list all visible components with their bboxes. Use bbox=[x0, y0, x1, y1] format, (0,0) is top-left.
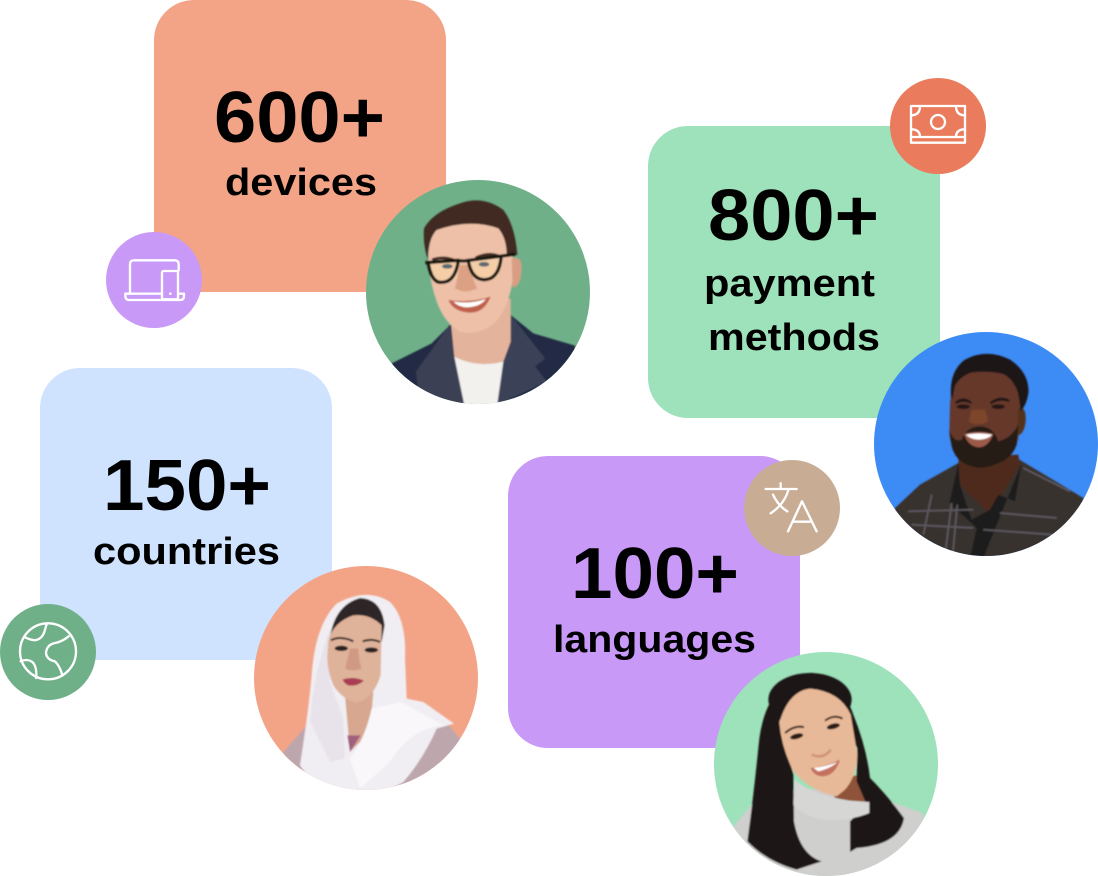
stat: 150+: 150+ bbox=[103, 446, 271, 526]
label: payment methods: payment bbox=[704, 263, 875, 305]
panel: countries bbox=[40, 368, 332, 660]
label: payment methods bbox=[704, 263, 880, 359]
portrait: woman with white headscarf bbox=[254, 566, 478, 790]
panel: payment methods bbox=[648, 126, 940, 418]
label: devices: devices bbox=[225, 162, 377, 204]
icon: laptop and tablet bbox=[106, 232, 202, 328]
icon: banknote bbox=[890, 78, 986, 174]
portrait: man with beard bbox=[870, 328, 1098, 568]
stat: 100+: 100+ bbox=[571, 534, 739, 614]
portrait: man with glasses bbox=[366, 180, 590, 404]
icon: globe bbox=[0, 604, 96, 700]
label: payment methods: methods bbox=[708, 317, 880, 359]
stat: 600+: 600+ bbox=[214, 78, 385, 158]
stat: 800+: 800+ bbox=[708, 176, 879, 256]
label: languages: languages bbox=[553, 619, 756, 661]
panel: devices bbox=[154, 0, 446, 292]
icon: translate bbox=[744, 460, 840, 556]
label: countries: countries bbox=[93, 531, 280, 573]
portrait: woman with grey turtleneck bbox=[710, 648, 950, 876]
panel: languages bbox=[508, 456, 800, 748]
